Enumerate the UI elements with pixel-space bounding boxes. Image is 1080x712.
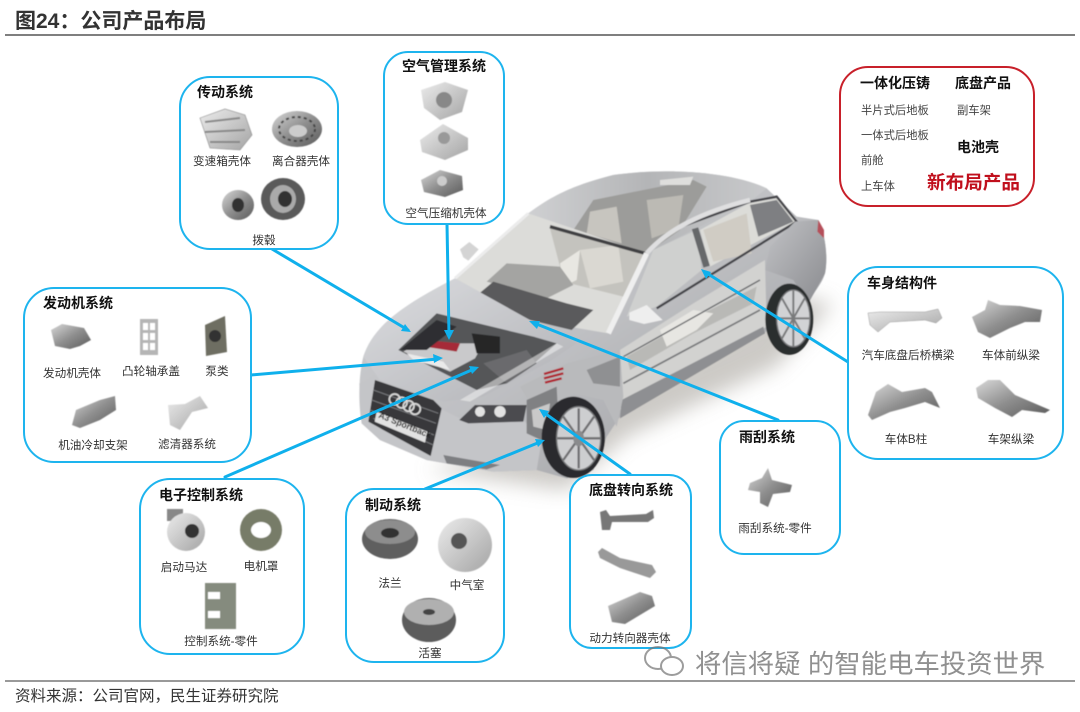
icon: 压缩机部件三 [421, 170, 463, 197]
icon: 车体B柱 [868, 384, 940, 420]
label: 车体B柱: 车体B柱 [885, 432, 928, 446]
panel: 车身结构件 [848, 267, 1063, 459]
icon: 转向部件二 [598, 548, 656, 578]
text: 一体式后地板: 一体式后地板 [861, 128, 929, 142]
icon: 机油冷却支架 [72, 396, 116, 428]
title: 图24：公司产品布局 [15, 10, 206, 33]
icon: front grille: A3 Sportback [377, 410, 433, 440]
heading: 一体化压铸: 一体化压铸 [860, 75, 930, 91]
heading: 空气管理系统: 空气管理系统 [402, 58, 486, 74]
icon: 启动马达 [167, 509, 205, 551]
label: 滤清器系统: 滤清器系统 [158, 438, 216, 451]
icon: doors and sill [620, 260, 767, 418]
heading: 传动系统: 传动系统 [197, 84, 253, 100]
label: 变速箱壳体: 变速箱壳体 [193, 154, 251, 168]
icon: 雨刮零件 [748, 468, 792, 507]
icon: 滤清器系统 [168, 396, 208, 430]
panel: 传动系统 [180, 77, 338, 249]
icon: 压缩机部件二 [420, 124, 468, 160]
source note: 资料来源：公司官网，民生证券研究院 [15, 686, 279, 705]
heading: 制动系统: 制动系统 [365, 497, 421, 513]
panel: 制动系统 [346, 489, 504, 662]
heading: 底盘转向系统: 底盘转向系统 [589, 482, 673, 498]
icon: front bumper [359, 383, 542, 472]
text: 前舱: 前舱 [861, 153, 884, 167]
icon: headlight [459, 405, 527, 423]
heading: 雨刮系统: 雨刮系统 [739, 429, 795, 445]
icon: 转向部件三 [608, 592, 655, 624]
icon: side windows [627, 197, 797, 317]
text: 半片式后地板: 半片式后地板 [861, 103, 929, 117]
icon: front grille [368, 380, 442, 456]
icon: 电机罩 [240, 509, 282, 551]
icon: windshield [455, 213, 647, 333]
label: 拨毂: 拨毂 [252, 233, 276, 247]
icon: 泵类 [205, 316, 227, 356]
panel: 底盘转向系统 [570, 475, 691, 648]
icon: 法兰 [362, 519, 418, 559]
heading: 电池壳: 电池壳 [957, 139, 999, 155]
label: 活塞: 活塞 [418, 646, 442, 660]
icon: rear quarter [765, 220, 826, 303]
icon: 发动机壳体 [51, 324, 91, 349]
label: 车架纵梁: 车架纵梁 [988, 432, 1035, 446]
icon: hood and engine bay [363, 278, 577, 402]
panel: 空气管理系统 [384, 52, 504, 224]
text: 副车架: 副车架 [957, 103, 991, 117]
icon: wechat [645, 647, 683, 675]
text: 上车体: 上车体 [861, 179, 895, 193]
icon: 转向部件一 [600, 510, 654, 530]
icon: 中气室 [438, 518, 492, 572]
icon: 压缩机部件一 [421, 82, 468, 120]
label: 汽车底盘后桥横梁: 汽车底盘后桥横梁 [862, 348, 955, 362]
label: 启动马达: 启动马达 [161, 560, 208, 574]
label: 法兰: 法兰 [378, 576, 402, 590]
label: 空气压缩机壳体: 空气压缩机壳体 [405, 206, 487, 220]
icon: front fender [520, 350, 623, 433]
heading: 电子控制系统: 电子控制系统 [159, 487, 243, 503]
icon: front wheel [542, 397, 605, 478]
watermark: 将信将疑 的智能电车投资世界 [695, 649, 1045, 679]
label: 雨刮系统-零件: 雨刮系统-零件 [738, 521, 812, 535]
label: 机油冷却支架: 机油冷却支架 [58, 438, 128, 452]
heading: 发动机系统: 发动机系统 [43, 295, 113, 311]
icon: 汽车底盘后桥横梁 [868, 309, 942, 332]
label: 电机罩: 电机罩 [244, 559, 278, 573]
icon: 活塞 [402, 598, 456, 642]
icon: 拨毂 [222, 178, 305, 220]
icon: 车架纵梁 [976, 380, 1050, 417]
label: 离合器壳体: 离合器壳体 [272, 154, 330, 168]
heading: 车身结构件: 车身结构件 [867, 275, 937, 291]
icon: side mirrors [460, 242, 479, 261]
icon: 凸轮轴承盖 [140, 319, 158, 355]
label: 控制系统-零件: 控制系统-零件 [184, 634, 258, 648]
connector arrows [225, 224, 848, 489]
panel: 电子控制系统 [140, 479, 304, 654]
label: 车体前纵梁: 车体前纵梁 [982, 348, 1040, 362]
car illustration [359, 171, 833, 490]
icon: 变速箱壳体 [200, 109, 252, 150]
icon: 控制系统零件 [205, 583, 236, 629]
label: 中气室: 中气室 [450, 578, 484, 592]
label: 发动机壳体: 发动机壳体 [43, 366, 101, 380]
label: 泵类: 泵类 [205, 364, 229, 378]
label: 新布局产品: 新布局产品 [927, 172, 1020, 193]
icon: 车体前纵梁 [972, 300, 1042, 338]
panel: 雨刮系统 [720, 421, 840, 554]
icon: suspension [527, 368, 563, 443]
icon: rear wheel [765, 284, 813, 355]
panel: 新布局产品 [840, 67, 1034, 206]
label: 凸轮轴承盖: 凸轮轴承盖 [122, 364, 180, 378]
heading: 底盘产品: 底盘产品 [955, 75, 1011, 91]
panel: 发动机系统 [24, 288, 251, 462]
icon: 离合器壳体 [272, 111, 322, 147]
icon: roof and interior [528, 171, 767, 253]
label: 动力转向器壳体: 动力转向器壳体 [589, 631, 671, 645]
